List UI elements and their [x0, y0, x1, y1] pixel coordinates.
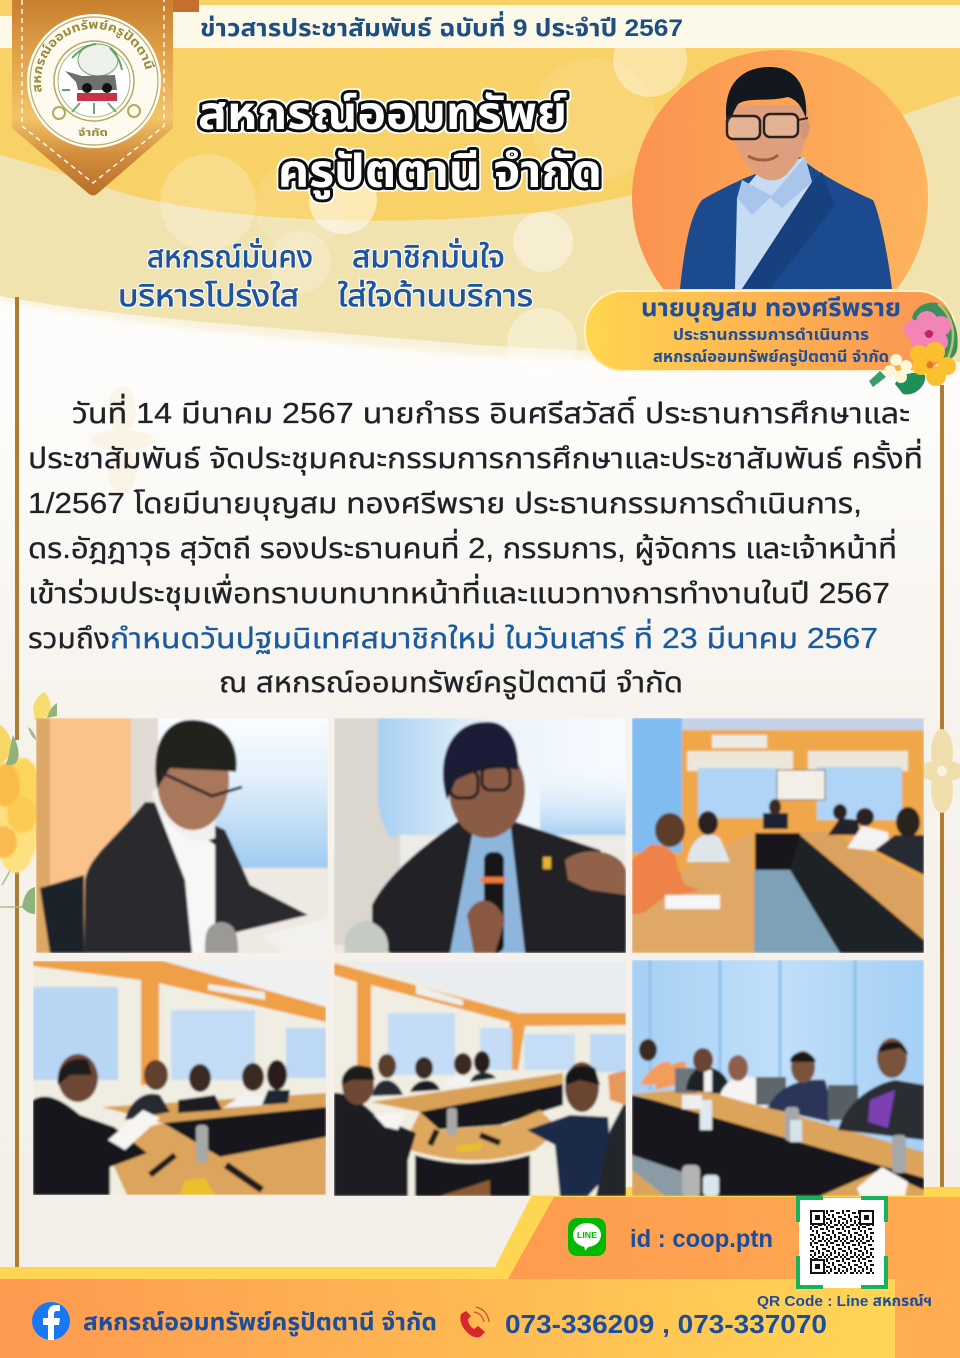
slogan: สมาชิกมั่นใจ — [352, 238, 505, 274]
QR code — [798, 1198, 886, 1288]
newsletter issue heading: ข่าวสารประชาสัมพันธ์ ฉบับที่ 9 ประจำปี 2567 — [200, 11, 683, 42]
chairman name: นายบุญสม ทองศรีพราย — [641, 294, 901, 323]
photo 2: chairman speaking — [334, 718, 626, 953]
body text: 1/2567 โดยมีนายบุญสม ทองศรีพราย ประธานกรรมการดำเนินการ, — [28, 488, 862, 520]
icon: tropical flowers — [869, 303, 958, 394]
body text: ดร.อัฎฎาวุธ สุวัตถี รองประธานคนที่ 2, กรรมการ, ผู้จัดการ และเจ้าหน้าที่ — [28, 528, 897, 566]
slogan: สหกรณ์มั่นคง — [147, 238, 313, 274]
title band — [0, 0, 960, 48]
photo 5: meeting table second view — [334, 961, 626, 1196]
icon: phone — [460, 1307, 489, 1337]
QR caption: QR Code : Line สหกรณ์ฯ — [757, 1293, 932, 1310]
body text: กำหนดวันปฐมนิเทศสมาชิกใหม่ ในวันเสาร์ ที่ 23 มีนาคม 2567 — [110, 618, 878, 655]
body text: เข้าร่วมประชุมเพื่อทราบบทบาทหน้าที่และแนวทางการทำงานในปี 2567 — [28, 573, 890, 610]
name plate — [585, 291, 955, 371]
body text — [28, 393, 923, 700]
logo seal: สหกรณ์ออมทรัพย์ครูปัตตานี — [34, 20, 156, 92]
logo seal: จำกัด — [78, 127, 108, 139]
slogan — [118, 238, 533, 313]
icon: right Thai ornament — [919, 729, 960, 813]
main title: ครูปัตตานี จำกัด — [278, 145, 602, 199]
LINE id: id : coop.ptn — [630, 1225, 773, 1253]
photo 1: man reading — [36, 718, 328, 953]
header background: yellow with curved pale band — [0, 0, 960, 378]
phone numbers: 073-336209 , 073-337070 — [505, 1309, 827, 1339]
slogan: บริหารโปร่งใส — [118, 280, 299, 313]
body text: ณ สหกรณ์ออมทรัพย์ครูปัตตานี จำกัด — [219, 667, 683, 700]
footer — [0, 1187, 960, 1358]
body text: วันที่ 14 มีนาคม 2567 นายกำธร อินศรีสวัสดิ์ ประธานการศึกษาและ — [72, 393, 910, 430]
main title — [198, 87, 602, 199]
portrait of chairman — [632, 50, 928, 289]
main title: สหกรณ์ออมทรัพย์ — [198, 87, 567, 139]
icon: left yellow flower — [0, 692, 57, 914]
logo seal — [27, 14, 161, 148]
icon: LINE — [568, 1218, 606, 1256]
chairman organisation: สหกรณ์ออมทรัพย์ครูปัตตานี จำกัด — [653, 349, 889, 367]
decorative Thai ornament behind text — [90, 386, 154, 494]
icon: Facebook — [32, 1302, 70, 1340]
Facebook page name: สหกรณ์ออมทรัพย์ครูปัตตานี จำกัด — [83, 1309, 437, 1337]
side frame lines — [15, 297, 944, 1267]
photo 4: meeting table left view — [33, 961, 326, 1195]
icon: LINE: LINE — [577, 1231, 598, 1240]
slogan: ใส่ใจด้านบริการ — [338, 280, 533, 313]
photo 6: committee members along table — [632, 960, 924, 1196]
chairman role: ประธานกรรมการดำเนินการ — [673, 327, 869, 344]
ribbon with logo — [12, 0, 173, 196]
body text: ประชาสัมพันธ์ จัดประชุมคณะกรรมการการศึกษาและประชาสัมพันธ์ ครั้งที่ — [28, 438, 923, 475]
photo 3: meeting room from end of table — [632, 718, 924, 953]
body text: รวมถึง — [28, 623, 110, 655]
